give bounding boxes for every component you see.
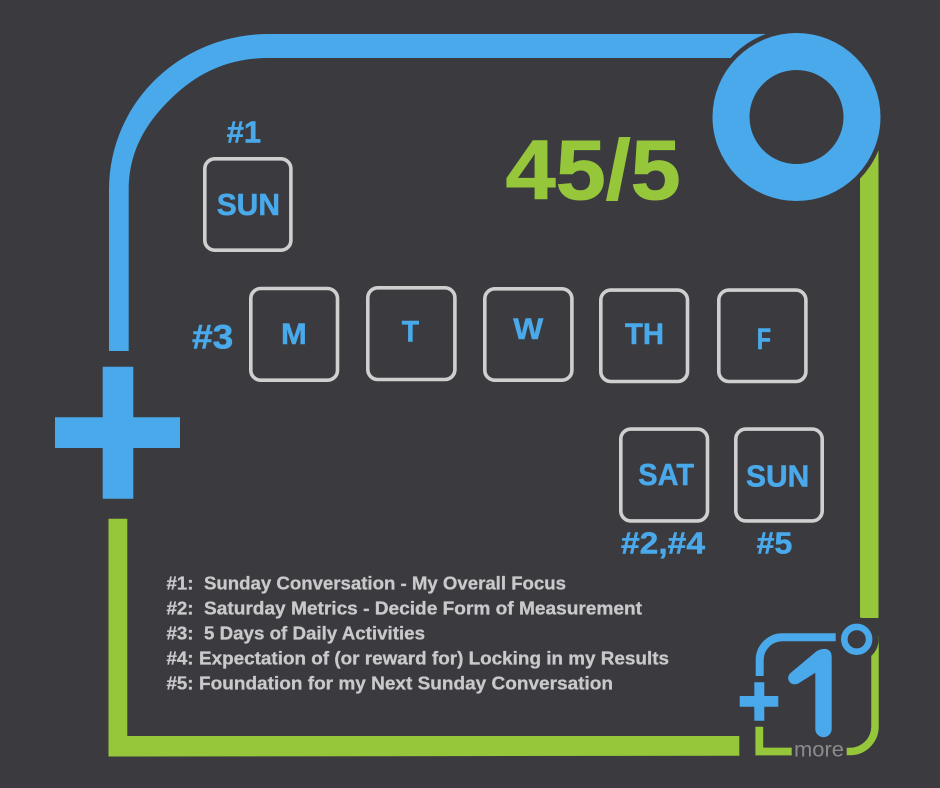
day box: first Sunday (205, 159, 291, 250)
frame: blue top-left band (109, 34, 775, 351)
legend line 4: Expectation of (or reward for) Locking in my Results (199, 647, 669, 668)
legend line 4: #4: (166, 647, 194, 668)
logo word: more: more (794, 739, 844, 762)
step label: #1: #1 (227, 115, 261, 150)
legend line 5: Foundation for my Next Sunday Conversation (199, 672, 613, 693)
day box: second Sunday: SUN (746, 459, 809, 494)
frame: green bottom-left band (108, 519, 739, 756)
icon: large blue plus (55, 367, 180, 499)
logo: +1 degree more (740, 617, 879, 762)
logo plus (740, 682, 778, 721)
logo green left corner (759, 727, 792, 752)
day box: Thursday (601, 290, 688, 382)
day box: second Sunday (736, 429, 822, 521)
day box: Monday: M (281, 318, 307, 351)
day box: Friday: F (757, 323, 771, 356)
day box: first Sunday: SUN (217, 187, 280, 222)
icon: large blue ring (731, 52, 862, 182)
legend line 1: #1: (166, 572, 194, 593)
step label: #3: #3 (192, 318, 233, 356)
logo degree ring (844, 627, 869, 652)
title: 45/5: 45/5 (506, 123, 681, 217)
logo green frame (847, 636, 875, 752)
legend line 2: #2: (166, 597, 194, 618)
day box: Monday (251, 288, 338, 380)
legend line 3: 5 Days of Daily Activities (204, 622, 425, 643)
step label: #5: #5 (757, 525, 792, 560)
day box: Wednesday (485, 289, 572, 380)
day box: Friday (719, 290, 806, 382)
day box: Wednesday: W (513, 313, 544, 346)
logo numeral one (788, 649, 832, 737)
day box: Tuesday: T (402, 316, 419, 349)
legend line 2: Saturday Metrics - Decide Form of Measurement (204, 597, 642, 618)
day box: Saturday (621, 429, 708, 521)
frame: green right band (860, 140, 878, 618)
text block: numbered legend (166, 572, 669, 693)
logo blue frame (760, 637, 836, 676)
day box: Tuesday (368, 288, 455, 380)
legend line 1: Sunday Conversation - My Overall Focus (204, 572, 566, 593)
legend line 5: #5: (166, 672, 194, 693)
step label: #2,#4: #2,#4 (621, 525, 706, 560)
day box: Thursday: TH (625, 318, 664, 351)
legend line 3: #3: (166, 622, 194, 643)
day box: Saturday: SAT (638, 457, 694, 492)
ring separator halo (708, 28, 885, 206)
logo ring halo (835, 617, 879, 661)
